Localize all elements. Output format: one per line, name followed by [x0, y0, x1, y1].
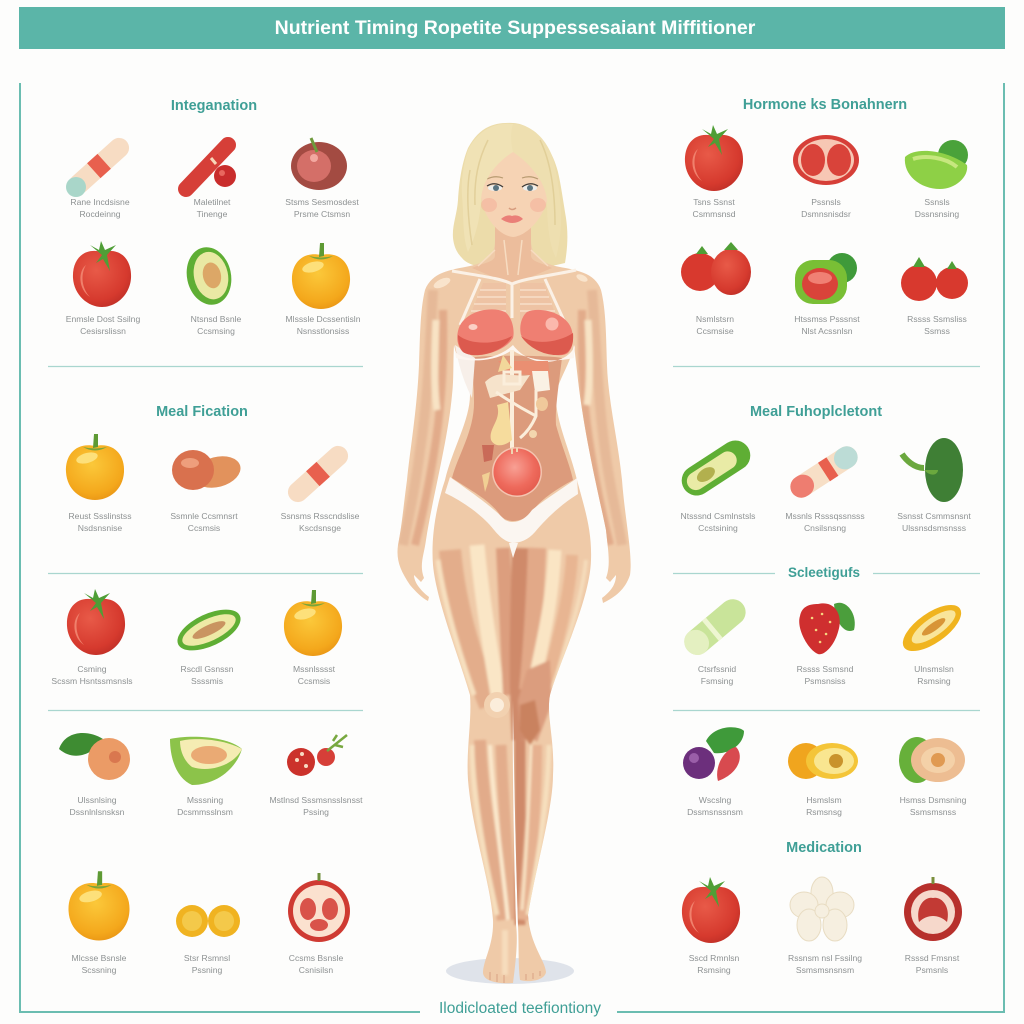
icon: peach with leaf [59, 733, 130, 780]
item [170, 737, 242, 817]
item: Nsmlstsrn [696, 314, 734, 324]
knee [484, 692, 510, 718]
item [170, 450, 244, 533]
item: Htssmss Psssnst [794, 314, 860, 324]
section: left row 5 [59, 733, 363, 817]
item [286, 243, 361, 336]
icon: cucumber [676, 435, 756, 501]
item: Ccsmsis [298, 676, 330, 686]
item: Mlcsse Bsnsle [72, 953, 126, 963]
icon: flower [790, 877, 854, 941]
icon: tomato [685, 125, 743, 191]
toes [490, 971, 540, 983]
item: Ccsms Bsnsle [289, 953, 343, 963]
icon: avocado dark [902, 438, 963, 502]
item [901, 257, 968, 336]
item: Ssnsls [924, 197, 950, 207]
section: left row 6 [68, 871, 350, 975]
icon: capsule [786, 442, 862, 502]
item [281, 442, 360, 533]
icon: cut fruit [793, 135, 859, 185]
heading: Hormone ks Bonahnern [743, 97, 907, 113]
title banner: Nutrient Timing Ropetite Suppessesaiant Miffitioner [275, 17, 756, 39]
item [683, 727, 744, 817]
section: Hormone [681, 97, 968, 336]
icon: green with strawberry [795, 253, 857, 304]
item: Kscdsnsge [299, 523, 341, 533]
item [66, 241, 140, 336]
item: Mssnlsssst [293, 664, 335, 674]
section: Integanation [65, 98, 361, 336]
ribs [470, 283, 556, 320]
heading: Meal Fication [156, 404, 248, 420]
item: Dsmnsnisdsr [801, 209, 851, 219]
icon: orange [284, 590, 342, 656]
item [676, 435, 756, 533]
item: Ssmnle Ccsmnsrt [170, 511, 238, 521]
item: Ntsnsd Bsnle [191, 314, 241, 324]
item: Ssmsmsnsnsm [796, 965, 854, 975]
item [905, 140, 968, 219]
icon: lemon [788, 743, 858, 779]
heading: Medication [786, 840, 862, 856]
hair back [453, 123, 567, 266]
item: Tinenge [197, 209, 228, 219]
shoulder highlights [432, 276, 452, 290]
stomach [492, 447, 542, 497]
item [65, 134, 133, 219]
item: Msssning [187, 795, 223, 805]
item: Mstlnsd Sssmsnsslsnsst [269, 795, 363, 805]
item [794, 253, 860, 336]
item: Rsmsing [697, 965, 731, 975]
item: Rsssd Fmsnst [905, 953, 959, 963]
item: Csnisilsn [299, 965, 333, 975]
item [679, 594, 751, 686]
item [793, 135, 859, 219]
section: right row 5 [683, 727, 967, 817]
face [481, 150, 548, 237]
item: Ccstsining [698, 523, 738, 533]
item: Psmsnls [916, 965, 948, 975]
item: Ctsrfssnid [698, 664, 736, 674]
item [171, 601, 247, 686]
item [788, 877, 862, 975]
item: Reust Ssslinstss [68, 511, 132, 521]
item: Dcsmmsslnsm [177, 807, 233, 817]
skin shading and leg stripes [403, 290, 622, 975]
icon: orange [68, 871, 130, 940]
body figure [398, 123, 631, 984]
item [186, 145, 236, 219]
item: Rssss Ssmsnd [797, 664, 853, 674]
item [899, 737, 967, 817]
item [176, 905, 240, 975]
item: Csmmsnsd [693, 209, 736, 219]
icon: green pepper [905, 140, 968, 189]
item [685, 125, 743, 219]
item [284, 590, 342, 686]
item [681, 242, 751, 336]
item: Pssning [192, 965, 223, 975]
icon: orange [66, 434, 124, 500]
item: Wscslng [699, 795, 731, 805]
lungs [455, 309, 575, 362]
item [181, 243, 242, 336]
item: Mlsssle Dcssentisln [286, 314, 360, 324]
item: Nsdsnsnise [78, 523, 122, 533]
body silhouette [398, 240, 631, 983]
icon: peach and green [899, 737, 965, 783]
item [285, 138, 359, 219]
section: Medication [682, 840, 962, 975]
item [896, 596, 968, 686]
item: Scssm Hsntssmsnsls [51, 676, 133, 686]
item: Nlst Acssnlsn [801, 326, 853, 336]
section: Meal Fication [66, 404, 360, 533]
icon: berries [287, 735, 347, 776]
icon: strawberry [799, 603, 855, 654]
icon: potatoes [172, 450, 244, 493]
white side panels [455, 345, 475, 398]
item [66, 434, 132, 533]
item [897, 438, 971, 533]
item: Rssss Ssmsliss [907, 314, 967, 324]
icon: avocado half [170, 737, 242, 785]
item: Ulssnlsing [77, 795, 117, 805]
item: Hsmslsm [806, 795, 842, 805]
icon: pill [284, 442, 352, 506]
icon: red pill [186, 145, 236, 189]
item: Nsnsstlonsiss [297, 326, 349, 336]
heading: Scleetigufs [788, 565, 860, 580]
icon: berry mix [683, 727, 744, 781]
item: Ssnsms Rsscndslise [281, 511, 359, 521]
item: Prsme Ctsmsn [294, 209, 350, 219]
item: Ssmsmsnss [910, 807, 956, 817]
item: Dssnsnsing [915, 209, 959, 219]
item: Rane Incdsisne [70, 197, 130, 207]
item: Stsms Sesmosdest [285, 197, 359, 207]
item: Stsr Rsmnsl [184, 953, 230, 963]
item [269, 735, 363, 817]
section: Scleetigufs [679, 565, 968, 686]
item: Psmsnsiss [804, 676, 846, 686]
item: Maletilnet [194, 197, 230, 207]
item: Rssnsm nsl Fssilng [788, 953, 862, 963]
item: Ssmss [924, 326, 950, 336]
heading: Integanation [171, 98, 257, 114]
item: Ulssnsdsmsnsss [902, 523, 966, 533]
item: Enmsle Dost Ssilng [66, 314, 140, 324]
neck [472, 225, 552, 285]
icon: avocado slice [171, 601, 247, 659]
heading: Meal Fuhoplcletont [750, 404, 882, 420]
clavicle lines [452, 270, 576, 325]
item [51, 589, 133, 686]
icon: tomato [67, 589, 125, 655]
item: Cnsilsnsng [804, 523, 846, 533]
item: Pssing [303, 807, 329, 817]
icon: yellow slice [896, 596, 968, 660]
item: Scssning [82, 965, 117, 975]
icon: two tomatoes [901, 257, 968, 301]
section: Meal Fuhoplcletont [676, 404, 971, 533]
pelvic band [445, 477, 578, 543]
item: Tsns Ssnst [693, 197, 735, 207]
item: Mssnls Rsssqssnsss [785, 511, 865, 521]
icon: cut tomato [288, 873, 350, 942]
item: Rocdeinng [79, 209, 121, 219]
eyes [488, 185, 502, 191]
item: Sscd Rmnlsn [689, 953, 739, 963]
icon: tomato [682, 877, 740, 943]
title banner [19, 7, 1005, 49]
item [288, 873, 350, 975]
item: Hsmss Dsmsning [900, 795, 966, 805]
icon: avocado [181, 243, 237, 309]
icon: cut red fruit [904, 877, 962, 941]
hair strands front [462, 124, 561, 258]
lips [501, 215, 523, 223]
item [904, 877, 962, 975]
item: Ntsssnd Csmlnstsls [681, 511, 755, 521]
icon: green capsule [679, 594, 751, 660]
nose [509, 208, 516, 210]
icon: pill [65, 134, 133, 198]
item [785, 442, 865, 533]
item: Ccsmsise [696, 326, 734, 336]
icon: tomato [73, 241, 131, 307]
section: left row 4 [51, 589, 342, 686]
item: Fsmsing [701, 676, 733, 686]
icon: two tomatoes [681, 242, 751, 295]
icon: orange [292, 243, 350, 309]
item [788, 743, 858, 817]
item: Ssnsst Csmmsnsnt [897, 511, 971, 521]
abdomen cavity [452, 356, 573, 521]
item: Ulnsmslsn [914, 664, 954, 674]
item: Pssnsls [811, 197, 841, 207]
item [59, 733, 130, 817]
item: Rscdl Gsnssn [180, 664, 234, 674]
icon: yellow pair [176, 905, 240, 937]
icon: plum [291, 138, 347, 190]
item: Ccsmsis [188, 523, 220, 533]
item [68, 871, 130, 975]
item: Dssnlnlsnsksn [70, 807, 125, 817]
item: Ssssmis [191, 676, 223, 686]
item: Cesisrslissn [80, 326, 126, 336]
item: Ccsmsing [197, 326, 235, 336]
item: Dssmsnssnsm [687, 807, 743, 817]
item: Csming [77, 664, 107, 674]
item [682, 877, 740, 975]
item: Rsmsing [917, 676, 951, 686]
digestive organs [482, 350, 550, 462]
floor shadow [446, 958, 574, 984]
footer caption: Ilodicloated teefiontiony [439, 1000, 601, 1017]
item [797, 603, 855, 686]
item: Rsmsnsg [806, 807, 842, 817]
